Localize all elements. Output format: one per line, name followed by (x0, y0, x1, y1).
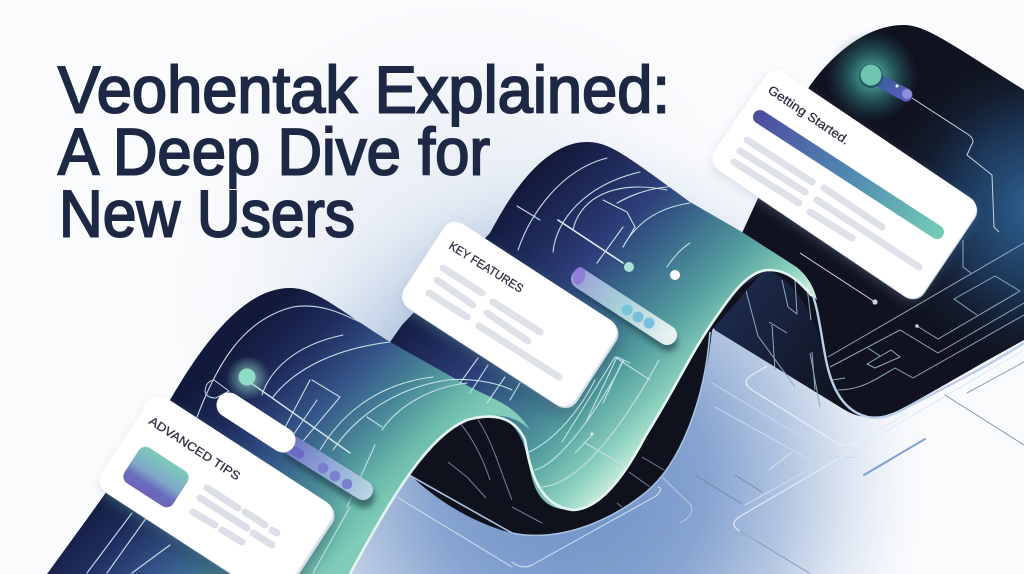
title: A Deep Dive for (58, 114, 490, 188)
card: Getting Started (707, 65, 983, 305)
title: New Users (59, 176, 355, 250)
back ribbon circuit lines (745, 98, 1024, 407)
card heading: Advanced Tips: ADVANCED TIPS (146, 414, 243, 483)
card shadows on ribbon (94, 222, 623, 574)
back ribbon surface (700, 25, 1024, 418)
ribbon bright edge (350, 270, 812, 574)
gradient thumbnail (120, 444, 192, 510)
gradient progress bar (760, 117, 937, 232)
floor panel with circuit outlines (200, 120, 1024, 574)
card heading: Key Features: KEY FEATURES (446, 239, 526, 296)
placeholder text lines (429, 268, 559, 377)
ribbon first wave surface (47, 288, 530, 574)
glowing node and connector on back ribbon (859, 64, 912, 99)
title (58, 52, 670, 250)
hump one glowing node (205, 356, 270, 400)
card heading: Getting Started: Getting Started. (765, 83, 852, 148)
title: Veohentak Explained: (58, 52, 670, 126)
hump one slider pill (229, 405, 364, 497)
card: Advanced Tips (94, 391, 340, 574)
card: Key Features (397, 217, 624, 413)
dark underside of ribbon (405, 275, 760, 535)
ribbon second wave surface (390, 142, 817, 510)
ribbon circuit lines (87, 158, 690, 573)
hump two slider pill (571, 262, 680, 342)
placeholder text lines (193, 488, 277, 545)
placeholder text lines (734, 140, 919, 267)
